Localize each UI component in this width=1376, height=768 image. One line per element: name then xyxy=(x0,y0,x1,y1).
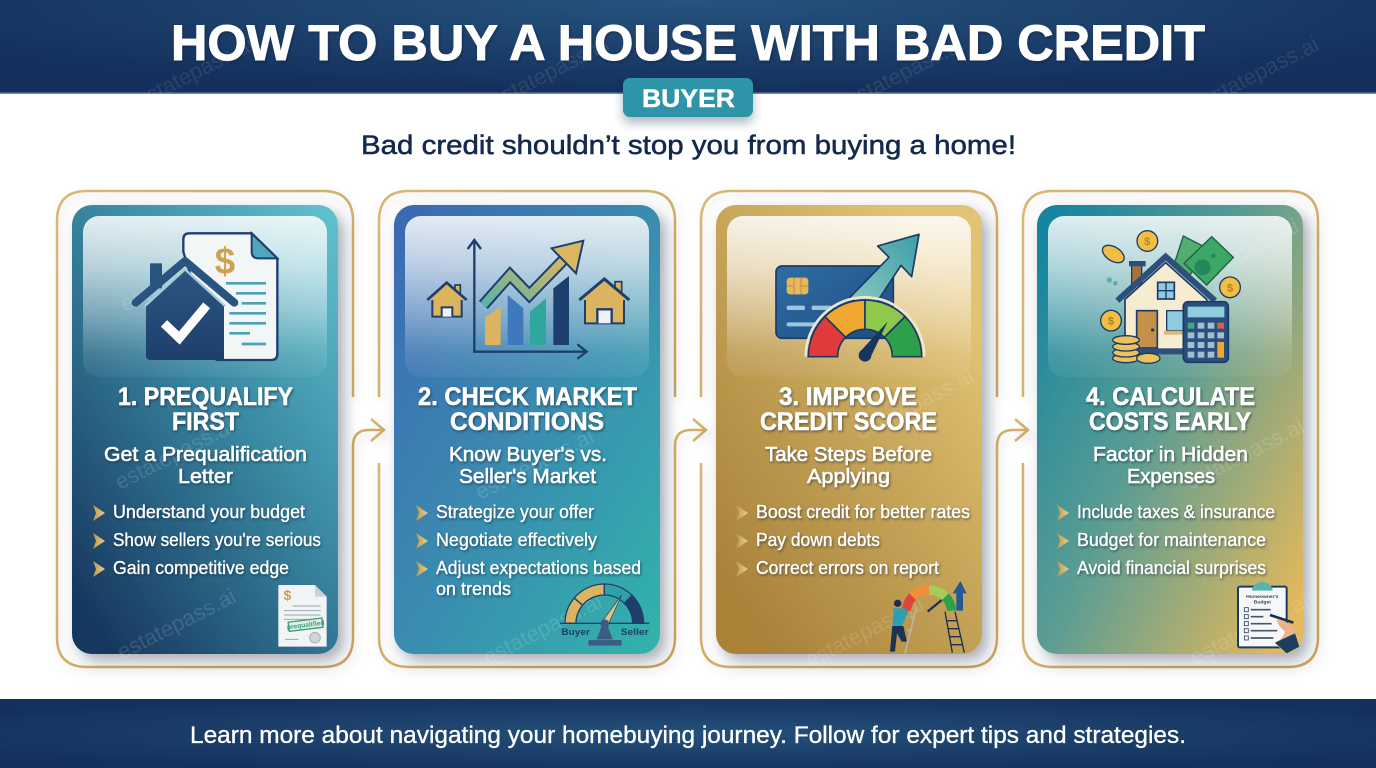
step 4 heading xyxy=(1086,383,1255,436)
step 2 bullet list: on trends xyxy=(436,578,511,599)
icon: house with prequalification letter: $ xyxy=(215,240,235,281)
badge: buyer: BUYER xyxy=(642,85,735,113)
step 4 subheading xyxy=(1093,443,1248,488)
footer banner xyxy=(0,699,1376,768)
panel: step 1 prequalify xyxy=(72,205,338,664)
step 2 bullet list: Strategize your offer xyxy=(436,501,594,522)
icon: budget checklist clipboard xyxy=(1238,582,1299,653)
step 1 heading: FIRST xyxy=(172,408,239,436)
icon: house with prequalification letter xyxy=(136,233,277,360)
step 4 subheading: Factor in Hidden xyxy=(1093,443,1248,466)
icon: house with money and calculator: $ xyxy=(1108,316,1115,328)
step 1 bullet list: Understand your budget xyxy=(113,501,305,522)
icon: credit card with score gauge xyxy=(776,234,924,362)
panel: step 4 calculate costs: estatepass.ai xyxy=(1176,213,1303,294)
icon: approved letter: prequalified xyxy=(287,620,325,631)
header banner: estatepass.ai xyxy=(841,31,968,112)
panel: step 4 calculate costs: estatepass.ai xyxy=(1186,588,1313,669)
panel: step 1 prequalify: estatepass.ai xyxy=(113,583,240,664)
step 2 heading: 2. CHECK MARKET xyxy=(418,383,637,411)
step 3 bullet list: Pay down debts xyxy=(756,529,880,550)
icon: budget checklist clipboard: Budget xyxy=(1254,599,1271,605)
panel: step 1 prequalify: estatepass.ai xyxy=(111,413,238,494)
icon: budget checklist clipboard: Homeowner's xyxy=(1246,594,1279,600)
step 2 bullet list: Negotiate effectively xyxy=(436,529,598,550)
icon: buyer seller gauge: Buyer xyxy=(561,627,590,637)
step 4 bullet list: Avoid financial surprises xyxy=(1077,557,1266,578)
panel: step 3 credit score: estatepass.ai xyxy=(801,591,928,672)
frame: step 4 xyxy=(1023,191,1318,667)
step 1 subheading: Letter xyxy=(178,465,233,488)
icon: house with money and calculator xyxy=(1099,231,1240,363)
step 4 bullet list: Budget for maintenance xyxy=(1077,529,1266,550)
icon: approved letter: $ xyxy=(283,587,291,603)
panel: step 1 prequalify: estatepass.ai xyxy=(116,235,243,316)
badge: buyer xyxy=(623,78,753,117)
header banner xyxy=(0,0,1376,112)
icon: house with money and calculator: $ xyxy=(1144,236,1151,248)
panel: step 4 calculate costs xyxy=(1037,205,1313,669)
frame and arrow: step 2 to 3 xyxy=(379,191,706,667)
step 1 bullet list: Gain competitive edge xyxy=(113,557,289,578)
step 4 bullet list: Include taxes & insurance xyxy=(1077,501,1275,522)
step 3 subheading xyxy=(765,443,932,488)
step 1 heading xyxy=(118,383,293,436)
icon: market growth chart with houses xyxy=(427,240,629,359)
step 3 bullet list xyxy=(736,501,970,578)
panel: step 3 credit score: estatepass.ai xyxy=(851,363,978,444)
frame and arrow: step 1 to 2 xyxy=(57,191,384,667)
panel: step 2 market conditions: estatepass.ai xyxy=(479,588,606,669)
tagline: Bad credit shouldn’t stop you from buying a home! xyxy=(361,130,1016,160)
step 2 subheading: Know Buyer's vs. xyxy=(449,443,607,466)
header banner: estatepass.ai xyxy=(486,31,613,112)
icon: house with money and calculator: $ xyxy=(1227,282,1234,294)
icon: approved letter xyxy=(278,585,327,647)
title: HOW TO BUY A HOUSE WITH BAD CREDIT xyxy=(171,15,1205,71)
step 4 subheading: Expenses xyxy=(1127,465,1215,488)
step 1 bullet list xyxy=(93,501,321,578)
step 3 heading: 3. IMPROVE xyxy=(779,383,917,411)
step 2 heading xyxy=(418,383,637,436)
header banner: estatepass.ai xyxy=(131,31,258,112)
step 2 bullet list xyxy=(416,501,641,599)
step 4 heading: COSTS EARLY xyxy=(1089,408,1251,436)
frame and arrow: step 3 to 4 xyxy=(701,191,1028,667)
footer call to action: Learn more about navigating your homebuying journey. Follow for expert tips and strategies. xyxy=(190,722,1186,749)
step 1 subheading xyxy=(104,443,307,488)
step 3 heading xyxy=(760,383,937,436)
icon: buyer seller gauge xyxy=(560,584,649,646)
panel: step 2 market conditions: estatepass.ai xyxy=(471,423,598,504)
step 3 subheading: Take Steps Before xyxy=(765,443,932,466)
step 3 bullet list: Correct errors on report xyxy=(756,557,939,578)
icon: person climbing ladder to score gauge xyxy=(890,581,967,653)
step 3 bullet list: Boost credit for better rates xyxy=(756,501,970,522)
step 3 heading: CREDIT SCORE xyxy=(760,408,937,436)
step 3 subheading: Applying xyxy=(807,465,890,488)
step 2 subheading: Seller's Market xyxy=(459,465,596,488)
step 1 subheading: Get a Prequalification xyxy=(104,443,307,466)
step 1 heading: 1. PREQUALIFY xyxy=(118,383,293,411)
step 2 subheading xyxy=(449,443,607,488)
step 1 bullet list: Show sellers you're serious xyxy=(113,529,321,550)
step 4 bullet list xyxy=(1057,501,1275,578)
icon: buyer seller gauge: Seller xyxy=(621,627,649,637)
step 4 heading: 4. CALCULATE xyxy=(1086,383,1255,411)
step 2 bullet list: Adjust expectations based xyxy=(436,557,641,578)
panel: step 4 calculate costs: estatepass.ai xyxy=(1181,413,1308,494)
panel: step 3 credit score xyxy=(716,205,982,672)
step 2 heading: CONDITIONS xyxy=(450,408,604,436)
header banner: estatepass.ai xyxy=(1196,31,1323,112)
panel: step 2 market conditions xyxy=(394,205,660,669)
